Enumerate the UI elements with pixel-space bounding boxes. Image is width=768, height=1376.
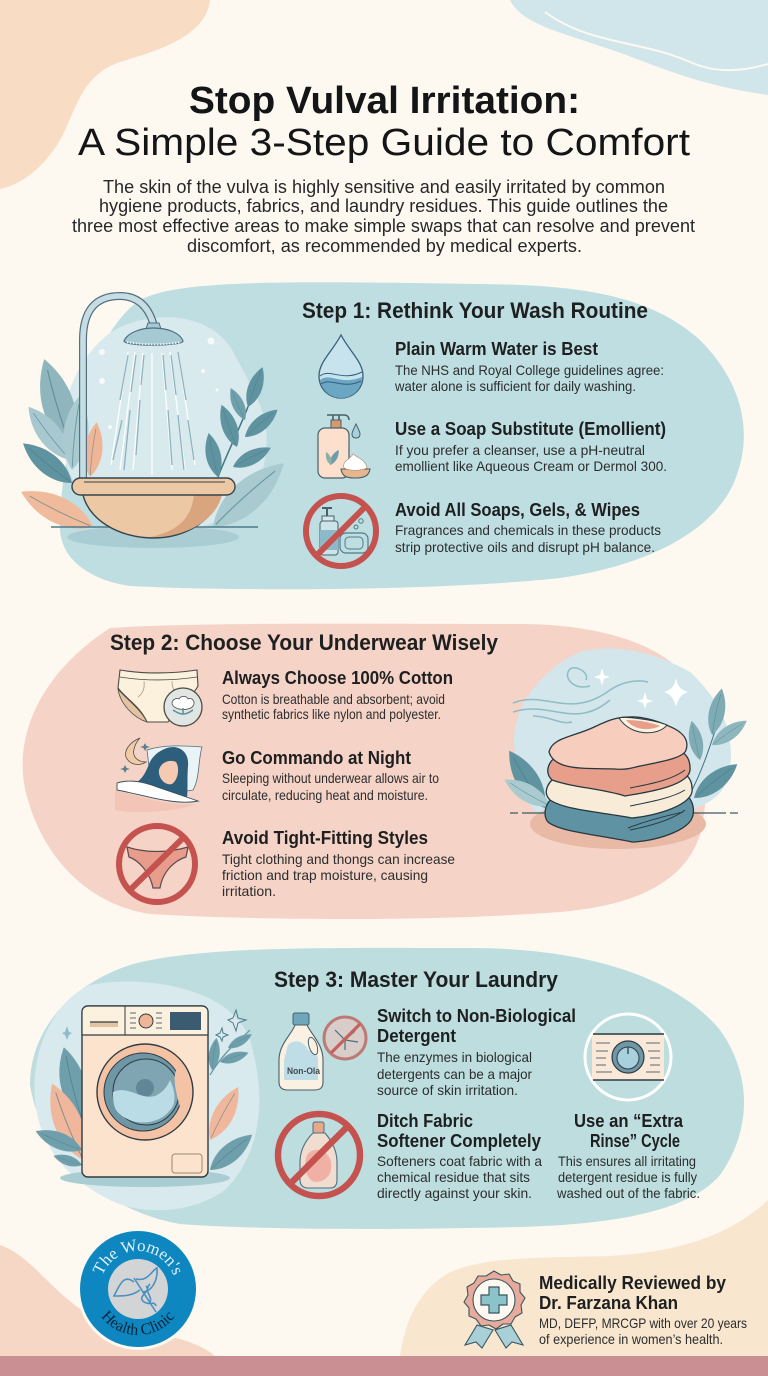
item: extra rinse: Use an “Extra bbox=[574, 1111, 684, 1131]
item: plain warm water bbox=[394, 339, 664, 394]
panel: step 1 bbox=[15, 282, 744, 589]
icon: cotton underwear bbox=[118, 670, 202, 726]
intro paragraph: The skin of the vulva is highly sensitive and easily irritated by common bbox=[103, 177, 665, 197]
background blob: top right blue bbox=[510, 0, 768, 95]
item: avoid tight: friction and trap moisture, causing bbox=[222, 867, 428, 883]
item: fabric softener bbox=[377, 1111, 542, 1201]
title: Stop Vulval Irritation: bbox=[189, 80, 580, 122]
intro paragraph: three most effective areas to make simple swaps that can resolve and prevent bbox=[72, 216, 695, 236]
item: fabric softener: Ditch Fabric bbox=[377, 1111, 473, 1131]
background blob: bottom right beige bbox=[400, 1200, 768, 1356]
item: extra rinse: washed out of the fabric. bbox=[556, 1185, 700, 1201]
icon: sleeping woman bbox=[115, 738, 202, 812]
credit: medically reviewed bbox=[539, 1273, 747, 1347]
item: non-biological: The enzymes in biological bbox=[377, 1049, 532, 1065]
item: avoid soaps bbox=[395, 500, 661, 555]
credit: medically reviewed: Medically Reviewed by bbox=[539, 1273, 726, 1293]
logo: The Women's Health Clinic bbox=[80, 1231, 196, 1350]
item: avoid tight bbox=[222, 828, 455, 899]
icon: no fabric softener bbox=[278, 1114, 360, 1196]
item: non-biological: Detergent bbox=[377, 1026, 456, 1046]
title: A Simple 3-Step Guide to Comfort bbox=[78, 122, 690, 164]
item: go commando: Go Commando at Night bbox=[222, 748, 411, 768]
heading: step 1: Step 1: Rethink Your Wash Routine bbox=[302, 298, 648, 323]
item: fabric softener: directly against your skin. bbox=[377, 1185, 532, 1201]
item: non-biological: detergents can be a major bbox=[377, 1066, 532, 1082]
icon: no soaps bbox=[306, 496, 376, 566]
item: plain warm water: Plain Warm Water is Best bbox=[395, 339, 598, 359]
item: soap substitute: emollient like Aqueous Cream or Dermol 300. bbox=[395, 458, 667, 474]
item: extra rinse bbox=[556, 1111, 700, 1201]
item: fabric softener: chemical residue that sits bbox=[377, 1169, 530, 1185]
icon: emollient pump bottle and cream bbox=[318, 415, 370, 478]
intro paragraph bbox=[72, 177, 695, 256]
panel: step 2 bbox=[23, 624, 751, 919]
item: go commando bbox=[222, 748, 439, 803]
intro paragraph: discomfort, as recommended by medical experts. bbox=[187, 236, 582, 256]
item: non-biological bbox=[377, 1006, 576, 1098]
item: plain warm water: The NHS and Royal College guidelines agree: bbox=[395, 362, 664, 378]
intro paragraph: hygiene products, fabrics, and laundry residues. This guide outlines the bbox=[99, 196, 668, 216]
icon: non-bio detergent bbox=[279, 1013, 366, 1090]
item: avoid soaps: Fragrances and chemicals in these products bbox=[395, 522, 661, 538]
item: extra rinse: Rinse” Cycle bbox=[590, 1131, 680, 1151]
footer bar bbox=[0, 1356, 768, 1376]
item: fabric softener: Softeners coat fabric with a bbox=[377, 1153, 542, 1169]
item: soap substitute: Use a Soap Substitute (Emollient) bbox=[395, 419, 666, 439]
item: non-biological: Switch to Non-Biological bbox=[377, 1006, 576, 1026]
background blob: bottom left peach bbox=[0, 1245, 215, 1356]
item: go commando: Sleeping without underwear allows air to bbox=[222, 770, 439, 786]
logo: The Women's Health Clinic: The Women's bbox=[92, 1239, 180, 1275]
credit: medically reviewed: Dr. Farzana Khan bbox=[539, 1293, 678, 1313]
badge: medical review rosette bbox=[464, 1271, 525, 1348]
illustration: shower and basin bbox=[15, 296, 294, 548]
item: avoid tight: Avoid Tight-Fitting Styles bbox=[222, 828, 428, 848]
item: fabric softener: Softener Completely bbox=[377, 1131, 541, 1151]
item: go commando: circulate, reducing heat and moisture. bbox=[222, 787, 428, 803]
item: soap substitute: If you prefer a cleanser, use a pH-neutral bbox=[395, 442, 645, 458]
heading: step 2: Step 2: Choose Your Underwear Wisely bbox=[110, 630, 499, 655]
item: cotton: synthetic fabrics like nylon and polyester. bbox=[222, 706, 441, 722]
item: non-biological: source of skin irritation. bbox=[377, 1082, 518, 1098]
heading: step 3: Step 3: Master Your Laundry bbox=[274, 967, 559, 992]
credit: medically reviewed: of experience in women’s health. bbox=[539, 1331, 723, 1347]
item: avoid tight: irritation. bbox=[222, 883, 276, 899]
illustration: washing machine bbox=[33, 982, 259, 1210]
item: cotton: Always Choose 100% Cotton bbox=[222, 668, 453, 688]
item: soap substitute bbox=[395, 419, 667, 474]
icon: water drop bbox=[319, 335, 363, 398]
icon: no tight underwear bbox=[119, 826, 195, 902]
title bbox=[78, 80, 690, 164]
icon: rinse dial bbox=[585, 1014, 671, 1100]
item: extra rinse: This ensures all irritating bbox=[558, 1153, 696, 1169]
item: avoid soaps: Avoid All Soaps, Gels, & Wipes bbox=[395, 500, 640, 520]
item: avoid soaps: strip protective oils and disrupt pH balance. bbox=[395, 539, 655, 555]
item: cotton: Cotton is breathable and absorbent; avoid bbox=[222, 691, 445, 707]
item: avoid tight: Tight clothing and thongs can increase bbox=[222, 851, 455, 867]
illustration: folded towels bbox=[500, 649, 751, 849]
background blob: top left peach bbox=[0, 0, 210, 189]
icon: non-bio detergent: Non-Ola bbox=[287, 1066, 321, 1077]
logo: The Women's Health Clinic: Health Clinic bbox=[101, 1310, 174, 1336]
item: extra rinse: detergent residue is fully bbox=[558, 1169, 697, 1185]
item: cotton bbox=[222, 668, 453, 722]
panel: step 3 bbox=[30, 948, 744, 1229]
item: plain warm water: water alone is sufficient for daily washing. bbox=[394, 378, 636, 394]
